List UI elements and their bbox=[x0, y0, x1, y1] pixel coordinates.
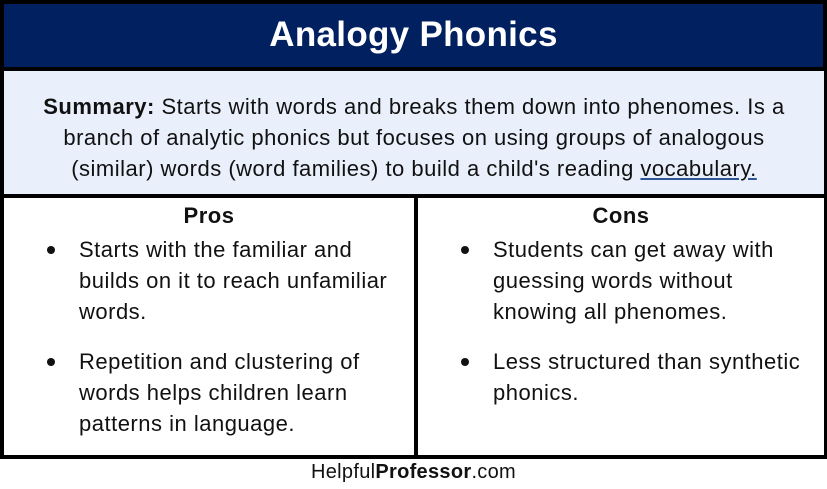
pros bullets: words. bbox=[79, 299, 147, 324]
cons heading: Cons bbox=[592, 203, 650, 228]
cons bullets: phonics. bbox=[493, 380, 579, 405]
cons bullets: Less structured than synthetic bbox=[493, 349, 800, 374]
divider bbox=[414, 197, 418, 455]
summary text: Summary: Starts with words and breaks them down into phenomes. Is a bbox=[43, 94, 785, 119]
pros bullets bbox=[47, 237, 387, 436]
cons bullets: knowing all phenomes. bbox=[493, 299, 727, 324]
title bar bbox=[0, 0, 827, 72]
cons bullets: guessing words without bbox=[493, 268, 733, 293]
summary text bbox=[43, 94, 785, 181]
cons bullets bbox=[461, 237, 800, 405]
panel: pros bbox=[47, 203, 387, 436]
pros heading: Pros bbox=[184, 203, 234, 228]
summary text: branch of analytic phonics but focuses on using groups of analogous bbox=[63, 125, 765, 150]
pros bullets: patterns in language. bbox=[79, 411, 295, 436]
footer: HelpfulProfessor.com bbox=[311, 461, 516, 483]
panel: cons bbox=[461, 203, 800, 405]
title: Analogy Phonics bbox=[269, 15, 558, 54]
summary text: (similar) words (word families) to build a child's reading vocabulary. bbox=[71, 156, 757, 181]
table: pros and cons bbox=[0, 197, 827, 459]
pros bullets: Starts with the familiar and bbox=[79, 237, 352, 262]
pros bullets: words helps children learn bbox=[79, 380, 348, 405]
cons bullets: Students can get away with bbox=[493, 237, 774, 262]
pros bullets: builds on it to reach unfamiliar bbox=[79, 268, 387, 293]
pros bullets: Repetition and clustering of bbox=[79, 349, 360, 374]
summary panel bbox=[0, 71, 827, 198]
